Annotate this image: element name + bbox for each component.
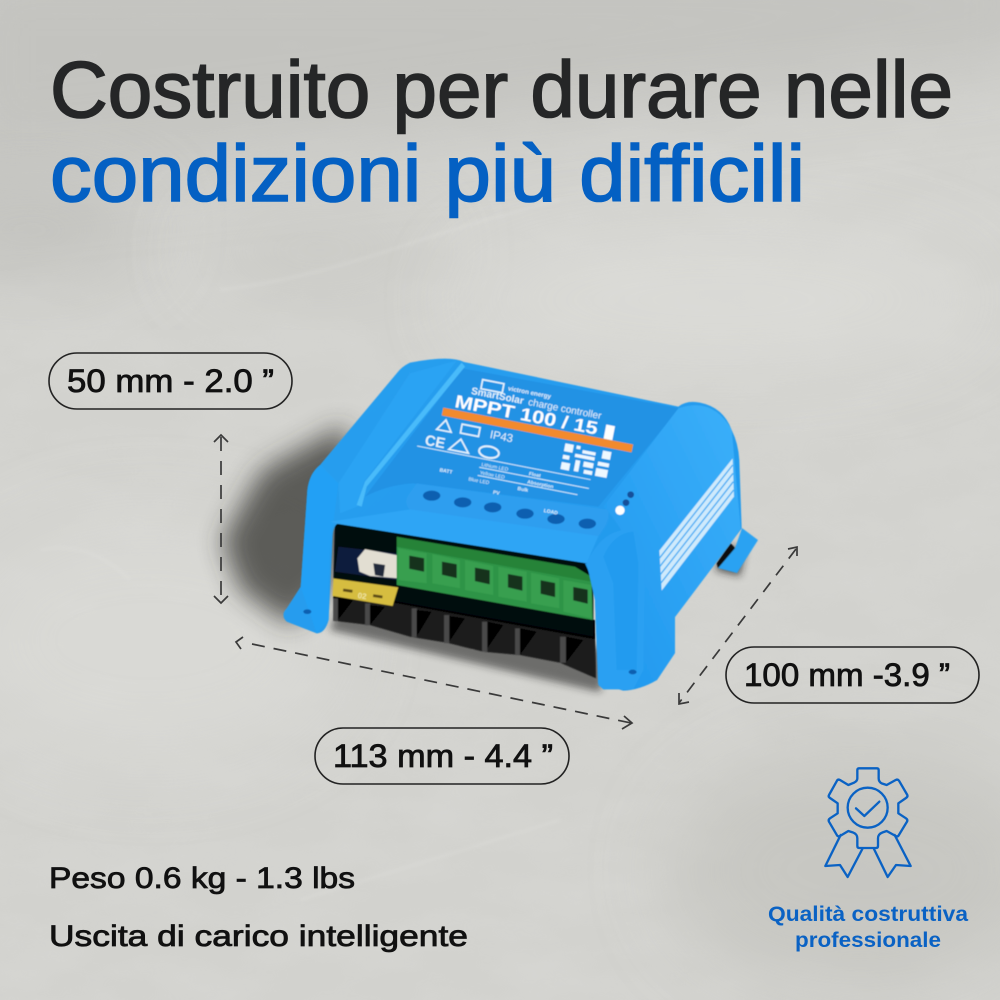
badge caption: Qualità costruttiva (768, 903, 968, 926)
terminal cover strip (406, 483, 609, 537)
yellow fuse (333, 578, 398, 606)
blue housing silhouette (283, 359, 742, 691)
brand: victron energy (507, 385, 552, 401)
label artwork on top face: LOAD (543, 508, 559, 517)
back mounting tab (717, 528, 758, 573)
label artwork on top face: Lithium LED (481, 462, 509, 473)
pill: depth: 100 mm -3.9 ” (744, 657, 950, 693)
label artwork on top face: Blue LED (468, 476, 490, 486)
label artwork on top face: CE (423, 433, 447, 452)
QR code (560, 443, 612, 478)
dimension arrow: width (236, 637, 632, 729)
yellow fuse: 02 (357, 591, 368, 601)
label artwork on top face: PV (492, 490, 501, 497)
status LEDs (615, 491, 634, 515)
dimension arrow: height (214, 435, 228, 603)
pill: height (49, 353, 292, 409)
white connector (357, 549, 397, 578)
title (50, 45, 953, 218)
load output text: Uscita di carico intelligente (49, 920, 468, 953)
right side face (603, 405, 741, 688)
weight text: Peso 0.6 kg - 1.3 lbs (49, 862, 355, 895)
dividers and small text (414, 446, 591, 497)
label artwork on top face: BATT (439, 467, 453, 476)
badge caption (768, 903, 968, 952)
interior cavity (333, 522, 593, 637)
label artwork on top face (409, 370, 640, 528)
front right leg (587, 530, 645, 689)
orange bar (442, 408, 633, 452)
icon: quality gear rosette (825, 768, 911, 877)
certification marks (437, 419, 453, 432)
device shadow (222, 425, 745, 692)
pill: width (315, 728, 569, 784)
heat sink (333, 590, 596, 678)
label artwork on top face: Absorption (527, 479, 554, 490)
front lip (330, 509, 598, 563)
product: charge controller (283, 359, 758, 691)
badge caption: professionale (795, 929, 941, 952)
product name: SmartSolar charge controller (470, 386, 603, 422)
top face (365, 368, 679, 507)
pill: height: 50 mm - 2.0 ” (67, 363, 274, 399)
label artwork on top face: MPPT 100 / 15 ▮ (453, 391, 617, 442)
label artwork on top face: Float (528, 471, 541, 479)
screw holes (303, 491, 637, 674)
title line 2: condizioni più difficili (50, 129, 805, 218)
left leg (301, 465, 338, 633)
white side label (659, 458, 734, 591)
dimension arrow: depth (679, 547, 797, 704)
title line 1: Costruito per durare nelle (50, 45, 953, 134)
label artwork on top face: IP43 (489, 429, 514, 445)
left shoulder highlight (338, 361, 457, 513)
label artwork on top face: Bulk (517, 486, 529, 494)
circuit board (335, 547, 397, 580)
label artwork on top face: Yellow LED (479, 470, 506, 481)
pill: width: 113 mm - 4.4 ” (333, 738, 553, 774)
pill: depth (726, 647, 979, 703)
green terminal block (397, 537, 593, 620)
